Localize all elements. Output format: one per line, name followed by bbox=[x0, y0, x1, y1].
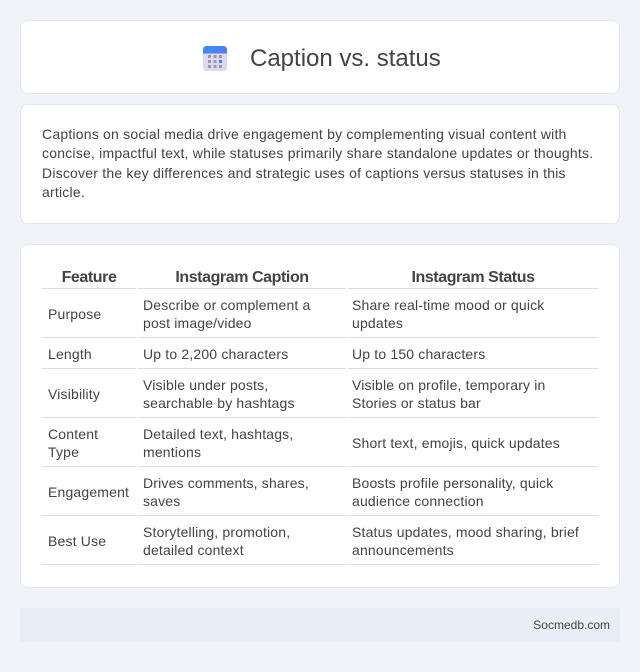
intro paragraph: concise, impactful text, while statuses primarily share standalone updates or thoughts. bbox=[42, 145, 593, 161]
cell: saves bbox=[143, 493, 180, 509]
intro paragraph: Discover the key differences and strategic uses of captions versus statuses in this bbox=[42, 165, 566, 181]
header: Feature: Feature bbox=[62, 269, 116, 286]
row: Engagement: Engagement bbox=[48, 484, 129, 500]
cell: audience connection bbox=[352, 493, 484, 509]
title: Caption vs. status bbox=[250, 45, 441, 72]
footer bar bbox=[20, 608, 620, 642]
cell bbox=[143, 475, 309, 509]
icon: calendar bbox=[203, 46, 227, 71]
cell bbox=[143, 524, 290, 558]
cell bbox=[352, 377, 546, 411]
cell bbox=[143, 377, 295, 411]
row: Purpose: Purpose bbox=[48, 306, 101, 322]
row: Content Type bbox=[48, 426, 98, 460]
cell: updates bbox=[352, 315, 403, 331]
cell: Short text, emojis, quick updates bbox=[352, 435, 560, 451]
cell: Storytelling, promotion, bbox=[143, 524, 290, 540]
cell: announcements bbox=[352, 542, 454, 558]
footer source text: Socmedb.com bbox=[533, 618, 610, 632]
intro paragraph: article. bbox=[42, 184, 85, 200]
cell: Describe or complement a bbox=[143, 297, 310, 313]
header: Instagram Caption: Instagram Caption bbox=[175, 269, 309, 286]
cell bbox=[143, 426, 293, 460]
intro paragraph bbox=[42, 126, 593, 200]
cell: Share real-time mood or quick bbox=[352, 297, 544, 313]
panel: comparison table bbox=[20, 244, 620, 588]
panel: title card bbox=[20, 20, 620, 94]
cell: Visible on profile, temporary in bbox=[352, 377, 546, 393]
cell: post image/video bbox=[143, 315, 252, 331]
row: Content Type: Content bbox=[48, 426, 98, 442]
cell: Status updates, mood sharing, brief bbox=[352, 524, 579, 540]
row: Content Type: Type bbox=[48, 444, 79, 460]
panel: intro text bbox=[20, 104, 620, 224]
cell: Up to 150 characters bbox=[352, 346, 485, 362]
cell: detailed context bbox=[143, 542, 244, 558]
cell: Boosts profile personality, quick bbox=[352, 475, 553, 491]
cell: mentions bbox=[143, 444, 201, 460]
cell: Visible under posts, bbox=[143, 377, 268, 393]
row: Length: Length bbox=[48, 346, 92, 362]
cell: searchable by hashtags bbox=[143, 395, 295, 411]
cell: Drives comments, shares, bbox=[143, 475, 309, 491]
intro paragraph: Captions on social media drive engagement by complementing visual content with bbox=[42, 126, 567, 142]
cell bbox=[352, 524, 579, 558]
row: Best Use: Best Use bbox=[48, 533, 106, 549]
row: Visibility: Visibility bbox=[48, 386, 100, 402]
cell bbox=[352, 475, 554, 509]
cell bbox=[143, 297, 310, 331]
cell: Stories or status bar bbox=[352, 395, 481, 411]
cell: Detailed text, hashtags, bbox=[143, 426, 293, 442]
cell: Up to 2,200 characters bbox=[143, 346, 288, 362]
header: Instagram Status: Instagram Status bbox=[411, 269, 535, 286]
cell bbox=[352, 297, 544, 331]
